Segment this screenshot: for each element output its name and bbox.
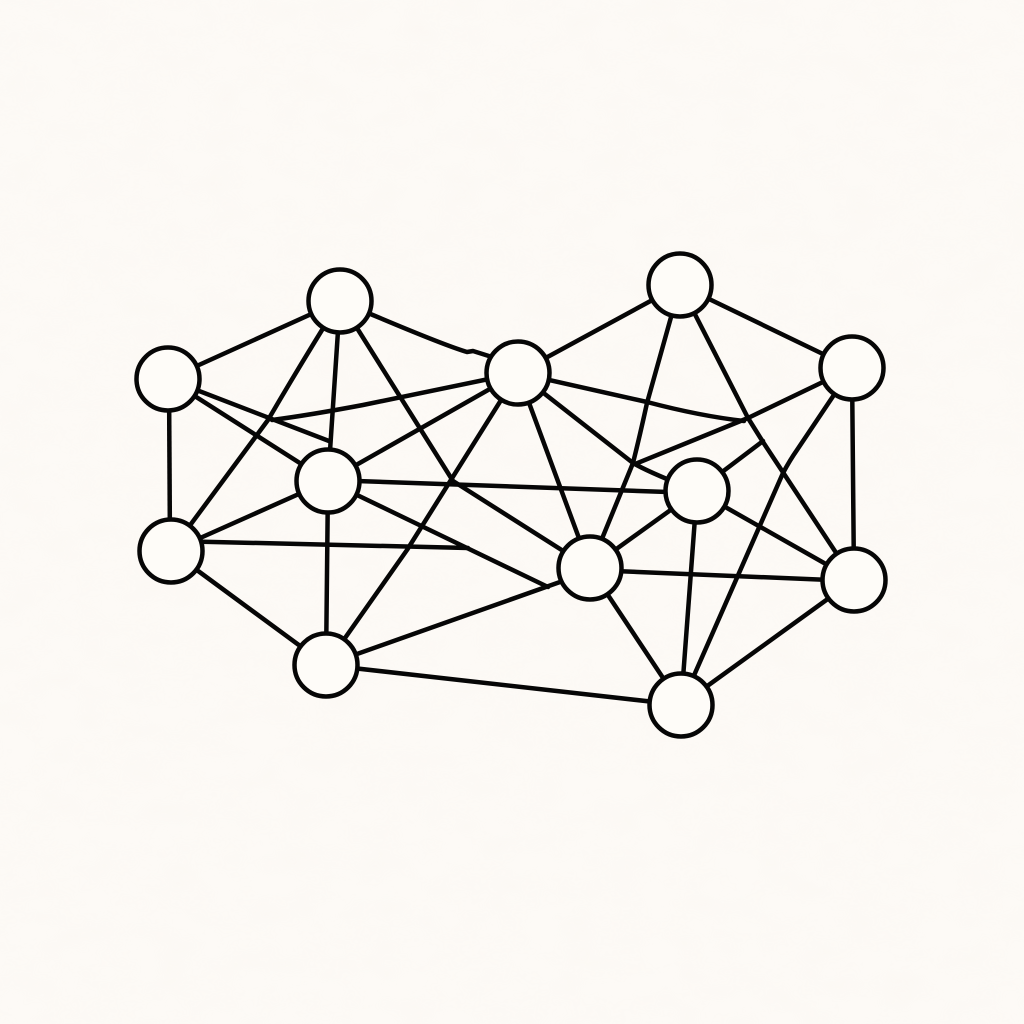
network nodes	[136, 254, 886, 736]
node 12	[650, 674, 712, 736]
node 8	[140, 520, 202, 582]
node 2	[308, 270, 372, 332]
node 9	[558, 536, 622, 600]
node 4	[648, 254, 712, 316]
network edges	[168, 285, 854, 705]
node 11	[294, 634, 358, 696]
node 6	[296, 450, 360, 512]
node 1	[136, 348, 200, 410]
node 5	[820, 336, 884, 400]
node 3	[486, 342, 550, 404]
node 10	[822, 548, 886, 612]
node 7	[666, 460, 728, 522]
